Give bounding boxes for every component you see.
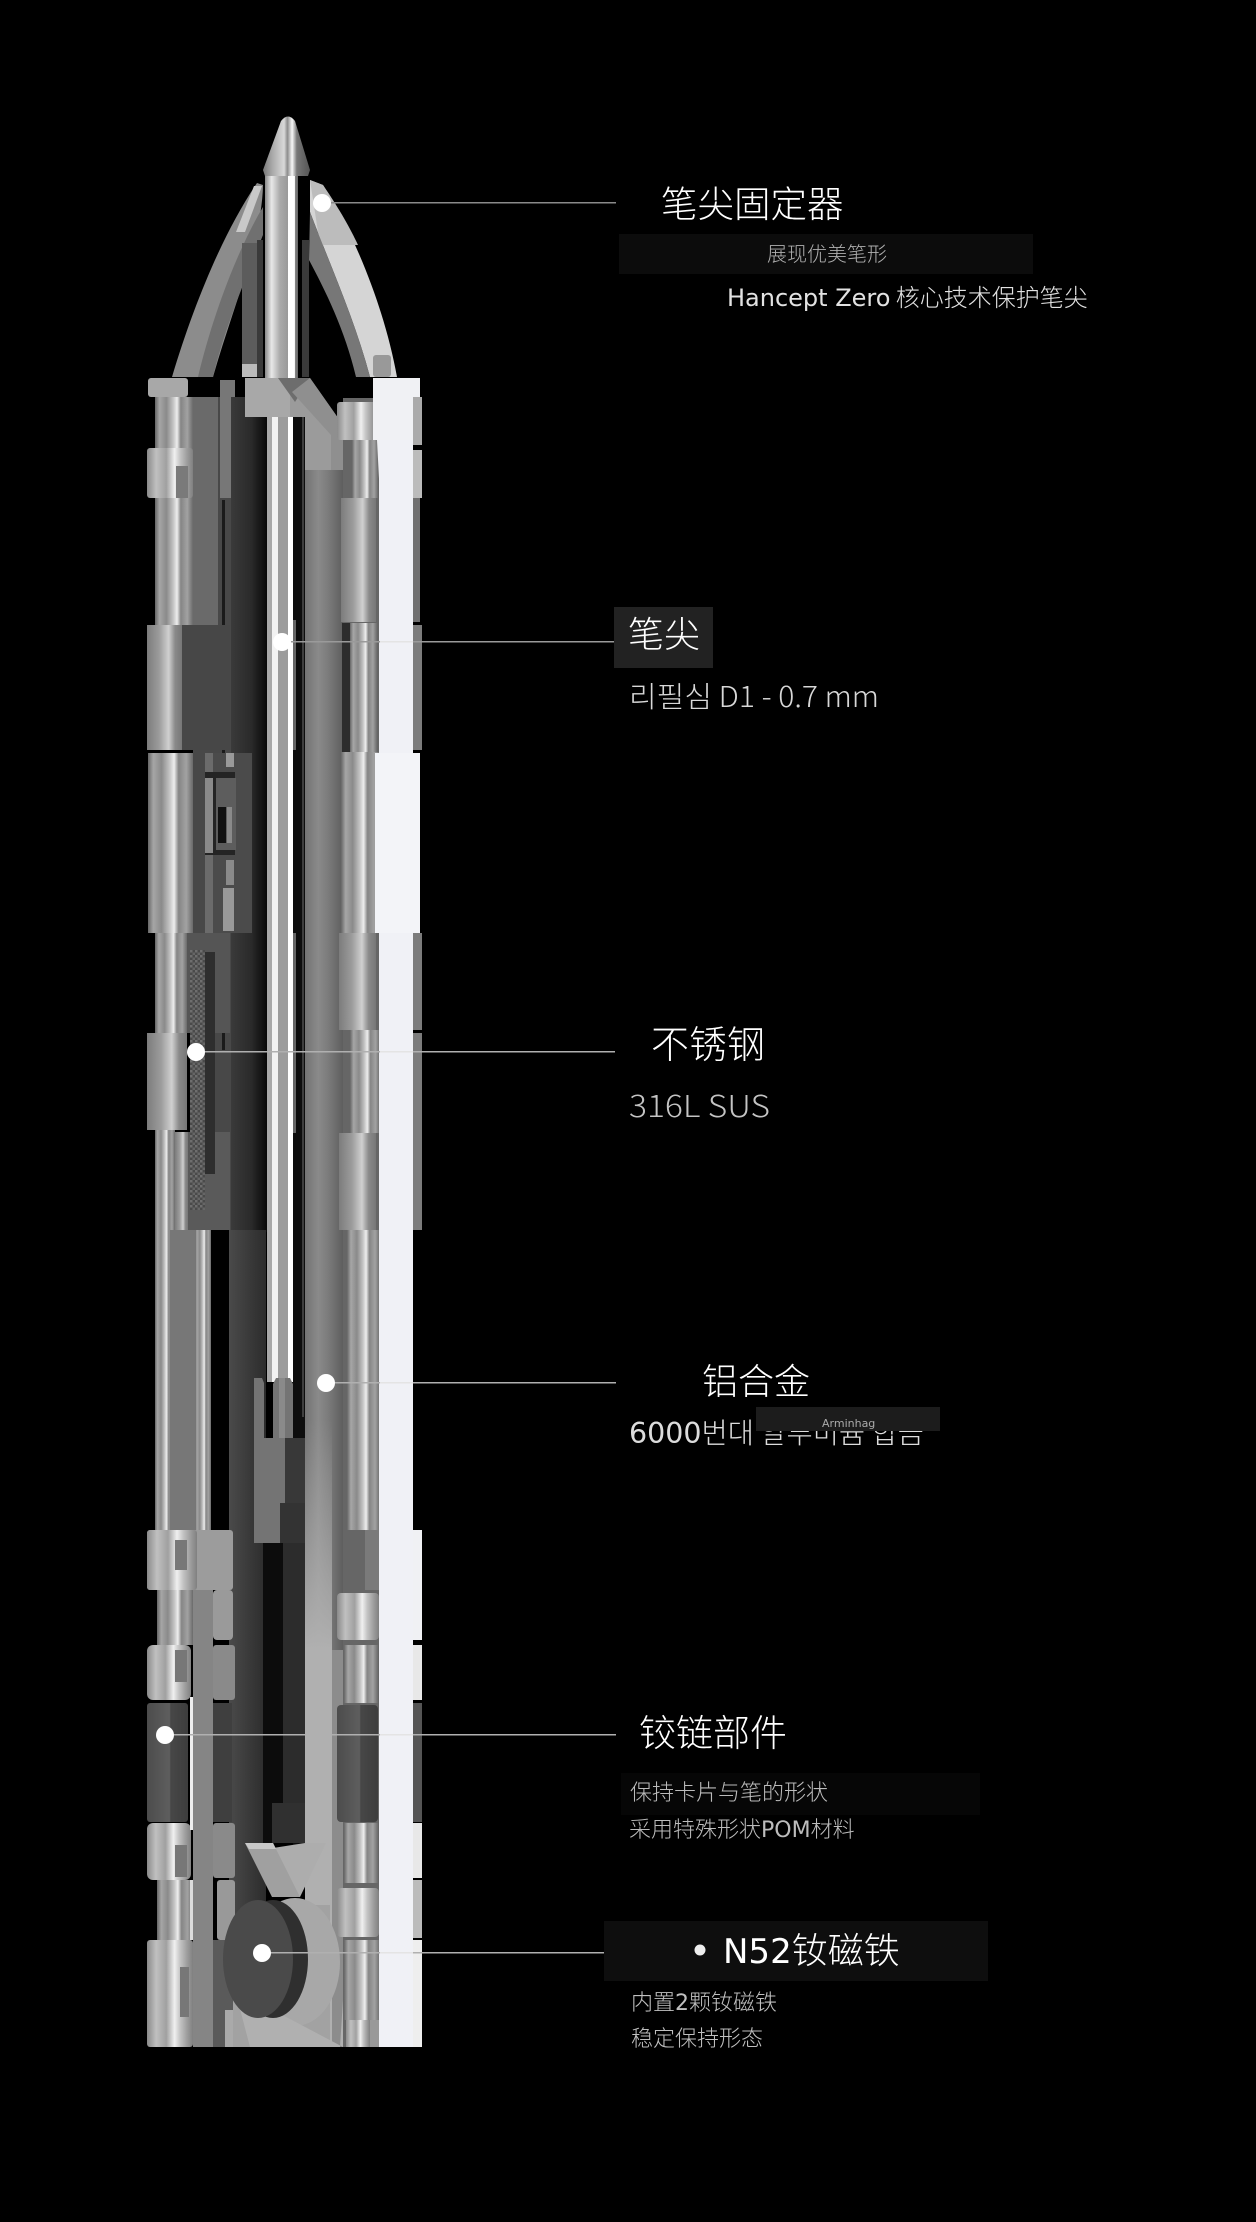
heading: stainless steel: 不锈钢 [651, 1014, 765, 1069]
caption: hinge parts: 采用特殊形状POM材料 [629, 1812, 855, 1844]
heading box: nib [614, 606, 713, 668]
leader line: nib holder [313, 194, 616, 212]
caption: hinge parts: 保持卡片与笔的形状 [630, 1775, 828, 1807]
nib and shaft [263, 116, 310, 378]
leader line: nib [273, 633, 614, 651]
caption: refill: 리필심 D1 - 0.7 mm [629, 674, 879, 716]
heading box: N52 magnet [604, 1921, 988, 1981]
caption: Hancept Zero: Hancept Zero 核心技术保护笔尖 [727, 278, 1088, 313]
nib holder arms [172, 180, 397, 377]
heading: aluminium: 铝合金 [702, 1353, 810, 1405]
watermark box: Arminhag [822, 1417, 875, 1430]
caption: magnets [631, 1985, 777, 2053]
right tube column [337, 398, 382, 2047]
caption: 316L SUS: 316L SUS [629, 1082, 770, 1126]
heading: hinge parts: 铰链部件 [639, 1703, 787, 1757]
magnet disc [223, 1900, 308, 2018]
leader line: magnet [253, 1944, 604, 1962]
gray side panel [245, 378, 343, 2047]
caption: magnets: 内置2颗钕磁铁 [631, 1985, 777, 2017]
leader line: stainless steel [187, 1043, 615, 1061]
caption: magnets: 稳定保持形态 [631, 2021, 763, 2053]
heading box: nib: 笔尖 [628, 606, 700, 658]
left tube column [147, 378, 235, 2047]
watermark box [756, 1407, 940, 1431]
inner dark panels [193, 380, 268, 1930]
pen cross-section render [147, 116, 422, 2047]
lower central block [254, 1378, 305, 1843]
caption: hinge parts [621, 1773, 980, 1844]
caption box: nib holder: 展现优美笔形 [767, 238, 887, 267]
leader line: aluminium [317, 1374, 616, 1392]
heading: nib holder: 笔尖固定器 [661, 175, 844, 228]
caption box: nib holder [619, 234, 1033, 274]
caption: aluminium alloy: 6000번대 알루미늄 합금 [629, 1411, 924, 1452]
leader line: hinge [156, 1726, 616, 1744]
central refill rod [267, 417, 305, 1847]
clip detail and knurled strip [190, 753, 252, 1210]
white outer panel [373, 378, 422, 2047]
wedge and hinge base [233, 1843, 343, 2047]
heading box: N52 magnet: N52钕磁铁 [723, 1922, 900, 1974]
